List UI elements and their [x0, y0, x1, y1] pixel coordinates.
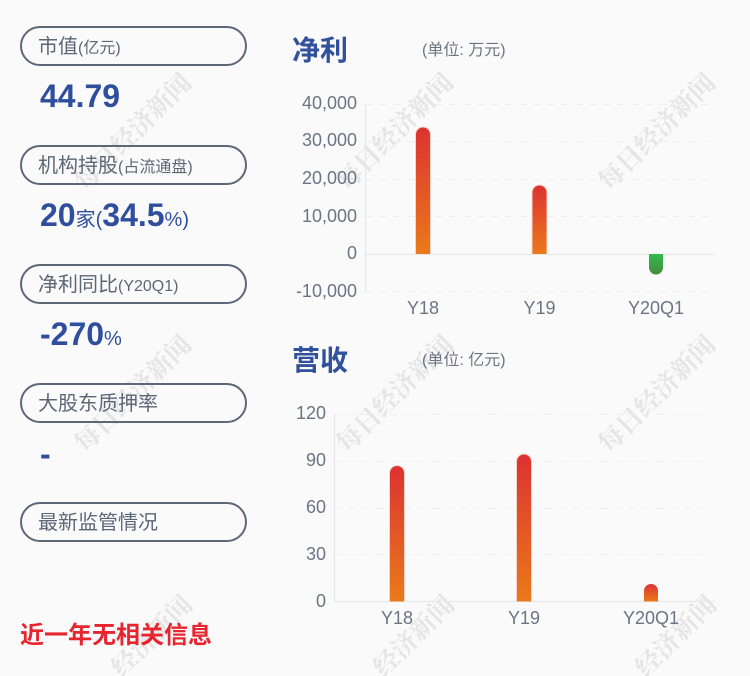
panel: institutional holdings	[21, 146, 246, 233]
watermarks: 每日经济新闻	[593, 330, 721, 458]
panel: shareholder pledge ratio	[21, 384, 246, 472]
bar chart: net profit: 10,000	[302, 206, 357, 226]
bar chart: net profit: Y20Q1	[628, 298, 684, 318]
bar chart: revenue: Y18	[381, 608, 413, 628]
unit: ten thousand yuan: (单位: 万元)	[422, 41, 506, 59]
bar chart: net profit: 30,000	[302, 130, 357, 150]
unit: hundred million yuan: (单位: 亿元)	[422, 351, 506, 369]
bar chart: revenue: 90	[306, 450, 326, 470]
watermarks: 每日经济新闻	[331, 68, 459, 196]
watermarks: 每日经济新闻	[593, 68, 721, 196]
panel: market cap	[21, 27, 246, 114]
bar chart: revenue: Y20Q1	[623, 608, 679, 628]
panel: institutional holdings: 机构持股(占流通盘)	[38, 154, 193, 177]
bar chart: net profit: 20,000	[302, 168, 357, 188]
heading: revenue: 营收	[292, 345, 348, 376]
bar chart: net profit: Y19	[523, 298, 556, 318]
bar chart: revenue: 120	[296, 403, 326, 423]
bar chart: revenue: 0	[316, 591, 326, 611]
panel: latest regulation	[21, 503, 246, 541]
heading: net profit: 净利	[292, 35, 348, 66]
callout: no related information: 近一年无相关信息	[20, 622, 212, 649]
watermarks: 每日经济新闻	[331, 330, 459, 458]
bar chart: net profit: Y18	[407, 298, 439, 318]
panel: net profit growth: -270%	[40, 316, 122, 352]
bar chart: net profit: -10,000	[296, 281, 357, 301]
panel: market cap: 44.79	[40, 78, 120, 114]
watermarks	[69, 68, 722, 676]
panel: latest regulation: 最新监管情况	[38, 511, 158, 534]
panel: institutional holdings: 20家(34.5%)	[40, 197, 189, 233]
panel: shareholder pledge ratio: 大股东质押率	[38, 392, 158, 415]
panel: net profit growth	[21, 265, 246, 352]
panel: shareholder pledge ratio: -	[40, 436, 51, 472]
panel: market cap: 市值(亿元)	[38, 35, 121, 58]
bar chart: revenue: 30	[306, 544, 326, 564]
bar chart: revenue: Y19	[508, 608, 540, 628]
bar chart: net profit: 0	[347, 243, 357, 263]
bar chart: revenue	[296, 403, 715, 628]
bar chart: net profit: 40,000	[302, 93, 357, 113]
bar chart: net profit	[296, 93, 715, 318]
panel: net profit growth: 净利同比(Y20Q1)	[38, 273, 178, 296]
watermarks: 每日经济新闻	[69, 330, 197, 458]
watermarks: 每日经济新闻	[69, 68, 197, 196]
bar chart: revenue: 60	[306, 497, 326, 517]
